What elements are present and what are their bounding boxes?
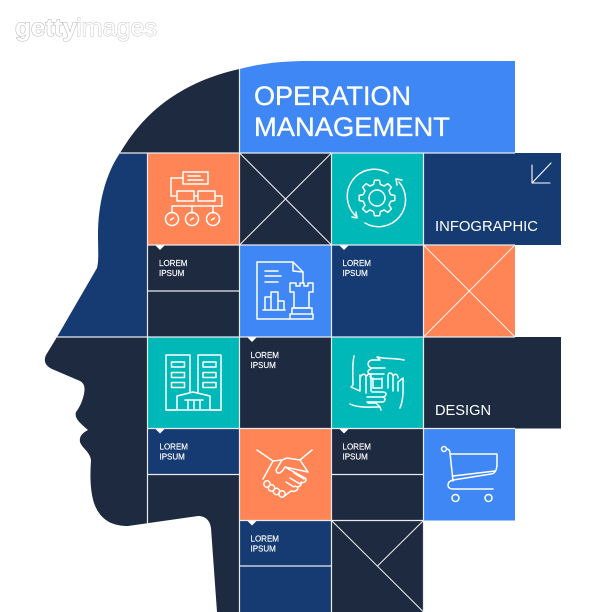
panel: lorem blue card (332, 245, 424, 337)
panel: infographic label (424, 153, 561, 245)
arrow (532, 163, 551, 183)
panel: title block: MANAGEMENT (254, 112, 450, 142)
panel: lorem dark card (148, 245, 240, 337)
grid lines (57, 69, 515, 612)
panel: blue document tile (240, 245, 332, 337)
panel: lorem dark card: IPSUM (159, 269, 185, 278)
panel: orange handshake tile (240, 428, 332, 520)
panel: lorem blue card: IPSUM (250, 544, 276, 554)
text: LOREM (250, 534, 279, 544)
panel: lorem blue card: IPSUM (160, 452, 185, 462)
title: OPERATION (254, 81, 411, 111)
panel: lorem dark card (332, 428, 424, 520)
icon: interlocked hands (350, 356, 404, 410)
panel: lorem blue card (148, 428, 240, 474)
panel: crossed dark tile (240, 153, 332, 245)
panel: teal gear tile (332, 153, 424, 245)
panel: crossed orange tile (424, 245, 515, 337)
panel: teal teamwork tile (332, 337, 424, 428)
head silhouette: blue forehead (57, 153, 148, 337)
watermark logo: getty (15, 14, 77, 42)
panel: crossed dark tile (332, 520, 424, 612)
icon: office buildings (166, 355, 221, 410)
panel: lorem blue card: IPSUM (342, 269, 368, 278)
panel: lorem dark card: IPSUM (342, 452, 368, 462)
panel: design label (424, 337, 561, 428)
panel: lorem dark card: IPSUM (250, 361, 276, 370)
panel: lorem dark card (240, 337, 332, 428)
panel: flowchart orange tile (148, 153, 240, 245)
icon: flowchart (166, 172, 222, 226)
panel: lorem blue card (240, 520, 332, 612)
watermark logo (15, 14, 157, 42)
head silhouette: dark face and neck (45, 69, 239, 612)
text: LOREM (342, 259, 371, 268)
icon: gear with cycle arrows (347, 169, 406, 227)
icon: shopping cart (442, 446, 497, 502)
watermark logo: images (76, 14, 157, 42)
text: LOREM (250, 351, 279, 360)
label: DESIGN (435, 402, 491, 419)
label: INFOGRAPHIC (435, 218, 538, 235)
panel: blue cart tile (424, 428, 515, 520)
panel: title block (240, 61, 515, 153)
text: LOREM (342, 442, 371, 452)
text: LOREM (160, 442, 188, 452)
icon: handshake (257, 450, 312, 497)
panel: teal building tile (148, 337, 240, 428)
text: LOREM (159, 259, 188, 268)
icon: document and chess rook (257, 262, 313, 319)
